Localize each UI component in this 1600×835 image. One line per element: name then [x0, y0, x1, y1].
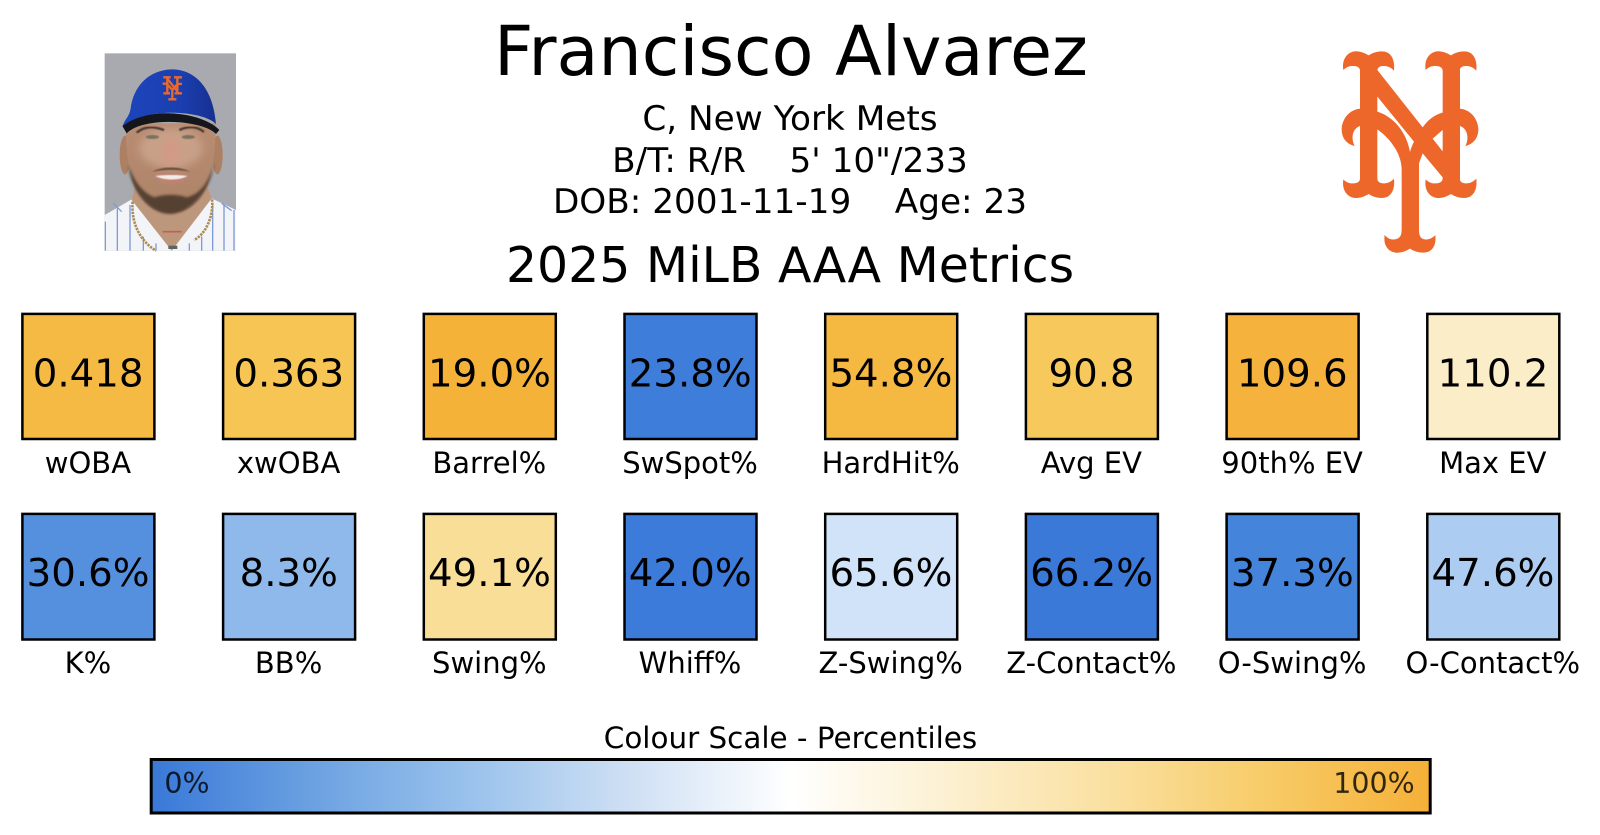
metric tile: 90th% EV [1221, 314, 1363, 480]
metric tile: Avg EV [1026, 314, 1158, 480]
metric tile: SwSpot%: 23.8% [629, 351, 752, 396]
metric tile: Swing%: 49.1% [428, 551, 551, 596]
metric tile: Z-Swing% [819, 514, 963, 680]
metric tile: K% [22, 514, 154, 680]
colour scale legend [151, 721, 1430, 813]
metric tile: xwOBA: 0.363 [233, 351, 344, 396]
metric tile: wOBA: 0.418 [33, 351, 143, 396]
metric tile: xwOBA [223, 314, 355, 480]
metric tile: Swing%: Swing% [432, 646, 547, 680]
player info: date of birth and age: DOB: 2001-11-19 Age: 23 [553, 182, 1027, 222]
section heading: 2025 MiLB AAA Metrics [506, 237, 1074, 294]
metric tile: BB%: 8.3% [240, 551, 338, 596]
metric tile: O-Contact%: 47.6% [1432, 551, 1554, 596]
legend title: Colour Scale - Percentiles [604, 721, 977, 755]
metric tile: Z-Contact% [1006, 514, 1177, 680]
metric tile: HardHit%: HardHit% [822, 446, 960, 480]
metric tile: Max EV [1427, 314, 1559, 480]
metric tile: SwSpot% [622, 314, 758, 480]
player info: position and team: C, New York Mets [642, 99, 938, 139]
metric tile: 90th% EV: 90th% EV [1221, 446, 1363, 480]
icon: player headshot [105, 53, 236, 251]
metric tile: K%: K% [65, 646, 111, 680]
icon: New York Mets NY logo [1342, 51, 1478, 253]
metric tile: BB%: BB% [255, 646, 322, 680]
legend high label: 100% [1333, 767, 1415, 800]
metric tile: Max EV: 110.2 [1438, 351, 1548, 396]
metric tile: O-Contact% [1406, 514, 1580, 680]
metric tile: Avg EV: Avg EV [1041, 446, 1142, 480]
metric tile: HardHit%: 54.8% [829, 351, 952, 396]
metric tile: HardHit% [822, 314, 960, 480]
metric tile: O-Swing% [1218, 514, 1366, 680]
legend gradient bar [151, 760, 1430, 813]
metric tile: wOBA [22, 314, 154, 480]
title: Francisco Alvarez [494, 13, 1088, 92]
metric tile: 90th% EV: 109.6 [1237, 351, 1348, 396]
metric tile: Barrel%: 19.0% [428, 351, 551, 396]
metric tile: Z-Contact%: Z-Contact% [1006, 646, 1177, 680]
metric tile: Whiff%: Whiff% [639, 646, 741, 680]
metric tile: K%: 30.6% [27, 551, 150, 596]
metric tile: Barrel%: Barrel% [432, 446, 546, 480]
metric tile: Whiff% [624, 514, 756, 680]
metric tile: wOBA: wOBA [45, 446, 131, 480]
player info: bats, throws, height, weight: B/T: R/R 5' 10"/233 [612, 141, 968, 181]
metric tile: Whiff%: 42.0% [629, 551, 752, 596]
legend low label: 0% [164, 767, 210, 800]
metric tile: Avg EV: 90.8 [1049, 351, 1135, 396]
metric tile: SwSpot%: SwSpot% [622, 446, 758, 480]
metric tile: O-Contact%: O-Contact% [1406, 646, 1580, 680]
metric tile: O-Swing%: O-Swing% [1218, 646, 1366, 680]
metric tile: xwOBA: xwOBA [237, 446, 340, 480]
metric tile: Z-Swing%: Z-Swing% [819, 646, 963, 680]
metric tile: Swing% [424, 514, 556, 680]
metric tile: Z-Contact%: 66.2% [1030, 551, 1153, 596]
metric tile: Barrel% [424, 314, 556, 480]
metric tile: BB% [223, 514, 355, 680]
metric tile: O-Swing%: 37.3% [1231, 551, 1354, 596]
metric tile: Z-Swing%: 65.6% [829, 551, 952, 596]
metric tile: Max EV: Max EV [1439, 446, 1547, 480]
